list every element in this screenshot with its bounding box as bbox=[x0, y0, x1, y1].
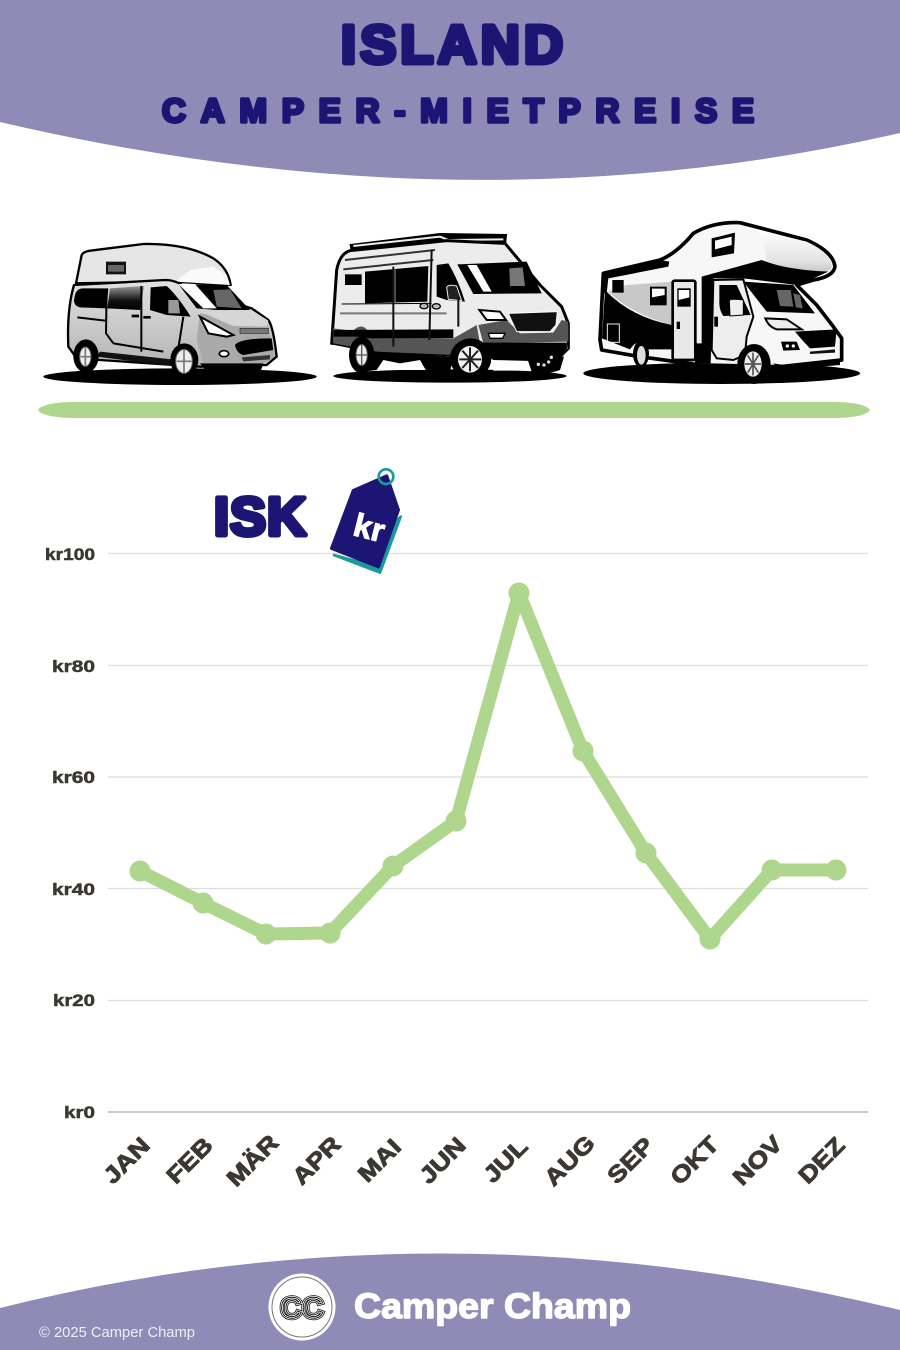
icon: price tag bbox=[332, 469, 401, 573]
icon: price tag: kr bbox=[350, 506, 389, 549]
x axis labels: JUL bbox=[479, 1134, 533, 1188]
vehicle: alcove motorhome bbox=[583, 223, 860, 384]
copyright: © 2025 Camper Champ bbox=[39, 1324, 195, 1341]
x axis labels: APR bbox=[288, 1132, 346, 1190]
x axis labels: JUN bbox=[415, 1133, 471, 1189]
header banner bbox=[0, 0, 900, 180]
x axis labels: JAN bbox=[99, 1133, 155, 1189]
icon: logo: CC bbox=[280, 1292, 324, 1325]
icon: logo bbox=[268, 1274, 336, 1340]
data line bbox=[140, 593, 836, 939]
vehicle: large panel van bbox=[332, 234, 568, 383]
green divider bar bbox=[38, 402, 870, 418]
subtitle: CAMPER-MIETPREISE bbox=[162, 92, 754, 129]
x axis labels: OKT bbox=[666, 1131, 725, 1190]
title: ISLAND bbox=[341, 15, 563, 75]
data points bbox=[130, 582, 846, 950]
footer banner bbox=[0, 1253, 900, 1350]
y axis labels: kr80 bbox=[52, 657, 95, 676]
y axis labels: kr20 bbox=[53, 991, 95, 1010]
x axis labels: SEP bbox=[603, 1133, 659, 1189]
y axis labels: kr40 bbox=[52, 880, 95, 899]
y axis labels: kr100 bbox=[45, 545, 95, 564]
currency label: ISK bbox=[214, 487, 306, 547]
icon: logo: CC bbox=[280, 1292, 324, 1325]
x axis labels bbox=[99, 1130, 850, 1192]
x axis labels: AUG bbox=[539, 1130, 600, 1191]
y axis labels bbox=[45, 545, 95, 1122]
x axis labels: NOV bbox=[728, 1131, 788, 1191]
brand name: Camper Champ bbox=[354, 1287, 631, 1326]
vehicle: campervan with high roof bbox=[43, 244, 317, 385]
x axis labels: FEB bbox=[162, 1133, 218, 1189]
x axis labels: MAI bbox=[353, 1134, 406, 1187]
icon: logo: CC bbox=[280, 1292, 324, 1325]
line chart bbox=[45, 545, 868, 1192]
y axis labels: kr60 bbox=[52, 768, 95, 787]
y axis labels: kr0 bbox=[64, 1103, 95, 1122]
x axis labels: MÄR bbox=[222, 1130, 284, 1192]
x axis labels: DEZ bbox=[794, 1133, 850, 1189]
